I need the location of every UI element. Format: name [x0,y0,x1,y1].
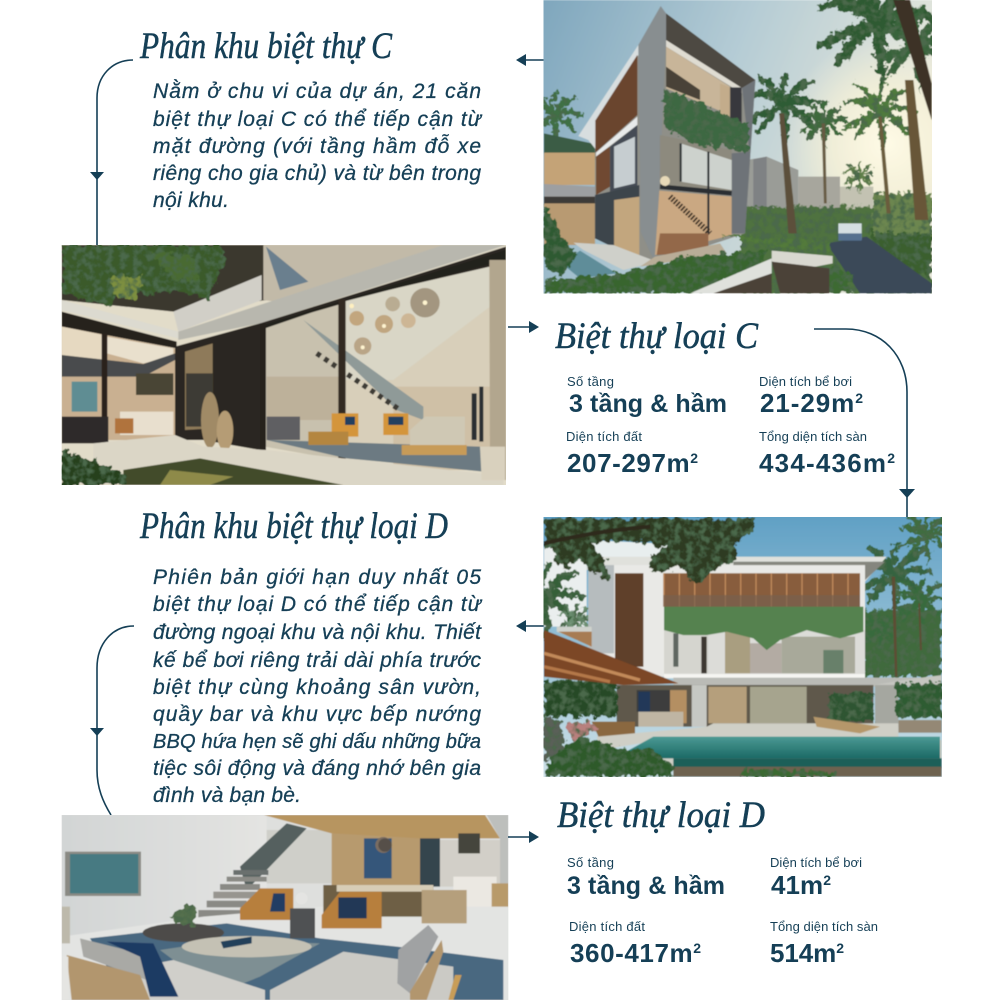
arrow: curved connector from zone D text to lower interior photo [90,626,134,815]
title: Biệt thự loại C: Biệt thự loại C [555,316,759,357]
text block: zone C description: nội khu. [153,189,229,212]
sofas [62,907,70,943]
photo: villa D exterior [544,517,942,777]
title: Biệt thự loại D: Biệt thự loại D [557,795,765,836]
deck [597,723,942,767]
specs: villa C: Diện tích đất [566,429,642,444]
text block: zone D description: đình và bạn bè. [153,784,301,807]
text block: zone D description [153,566,483,807]
tv [65,852,141,896]
specs: villa D: 2 [693,940,701,956]
text block: zone D description: quầy bar và khu vực bếp nướng [153,703,481,726]
arrow: pointing right to villa C specs [508,321,539,333]
tables [143,923,224,942]
hanging plant [664,607,863,650]
arrow: pointing left to villa D photo [516,620,544,632]
lower facade [708,630,865,674]
branch [544,518,757,585]
concrete pier [638,6,666,54]
photo: living room villa D [60,810,510,1000]
specs: villa D: Số tầng [567,855,614,870]
text block: zone C description [153,80,483,212]
text block: zone C description: riêng cho gia chủ) và từ bên trong [153,162,481,185]
floor [94,434,446,470]
specs: villa C: 2 [887,450,895,466]
text block: zone D description: biệt thự cùng khoảng sân vườn, [153,676,481,699]
text block: zone C description: Nằm ở chu vi của dự án, 21 căn [153,80,481,103]
foreground plants [544,518,837,777]
terrace [573,243,657,270]
art [364,838,392,878]
floor [76,913,241,936]
text block: zone D description: biệt thự loại D có thể tiếp cận từ [153,593,483,616]
foreground [544,87,853,293]
specs: villa C: Diện tích bể bơi [759,374,852,389]
specs: villa D [567,855,878,968]
text block: zone C description: mặt đường (với tầng hầm đỗ xe [153,135,481,158]
title: Phân khu biệt thự C: Phân khu biệt thự C [139,26,393,67]
arrow: curved connector from villa C specs down to villa D photo [814,329,915,517]
text block: zone D description: đường ngoại khu và nội khu. Thiết [153,621,482,644]
kitchen [453,877,497,907]
photo: villa C exterior [544,0,932,294]
ground floor [617,685,873,727]
specs: villa C [566,374,895,478]
glass room [265,305,339,460]
specs: villa C: 434-436m [759,448,886,478]
specs: villa C: 21-29m [760,388,854,418]
dining [323,885,433,917]
specs: villa C: Tổng diện tích sàn [759,429,867,444]
text block: zone D description: tiệc sôi động và đáng nhớ bên gia [153,757,481,780]
roof [587,557,887,582]
specs: villa C: 2 [690,450,698,466]
photo: interior living room villa C [60,240,510,487]
text block: zone D description: BBQ hứa hẹn sẽ ghi dấu những bữa [153,731,481,753]
roof soffit [666,13,755,88]
pendant lights [410,288,440,317]
bbq [62,417,108,443]
specs: villa D: Diện tích bể bơi [770,855,862,870]
specs: villa D: 2 [823,872,831,888]
wood panels [578,45,638,150]
stairs [240,823,307,890]
specs: villa C: Số tầng [567,374,614,389]
chairs [240,888,293,920]
text block: zone C description: biệt thự loại C có thể tiếp cận từ [153,108,483,131]
pool [620,737,940,758]
specs: villa C: 3 tầng & hầm [569,390,727,418]
specs: villa D: 514m [770,938,836,968]
furniture [267,417,300,440]
specs: villa D: 3 tầng & hầm [567,872,725,900]
left wing [556,626,592,634]
specs: villa D: 41m [771,870,823,900]
arrow: curved connector from zone C heading down to interior photo [90,60,133,245]
arrow: pointing right to villa D specs [508,831,539,843]
upper interior [666,47,730,115]
arrow: pointing left to villa C photo [516,54,544,66]
title: Phân khu biệt thự loại D: Phân khu biệt thự loại D [139,506,448,547]
rug [90,923,503,1000]
lower glass [660,136,731,190]
specs: villa C: 207-297m [567,448,690,478]
plant and tree [62,245,227,485]
slab [673,678,942,687]
left wing [544,133,595,160]
specs: villa D: 2 [836,940,844,956]
right pier [731,80,755,233]
specs: villa D: Tổng diện tích sàn [770,919,878,934]
text block: zone D description: Phiên bản giới hạn duy nhất 05 [153,566,481,589]
specs: villa C: 2 [855,390,863,406]
building base [595,13,755,263]
specs: villa D: 360-417m [570,938,693,968]
white facade [588,565,865,677]
specs: villa D: Diện tích đất [569,919,645,934]
text block: zone D description: kế bể bơi riêng trải dài phía trước [153,649,482,672]
